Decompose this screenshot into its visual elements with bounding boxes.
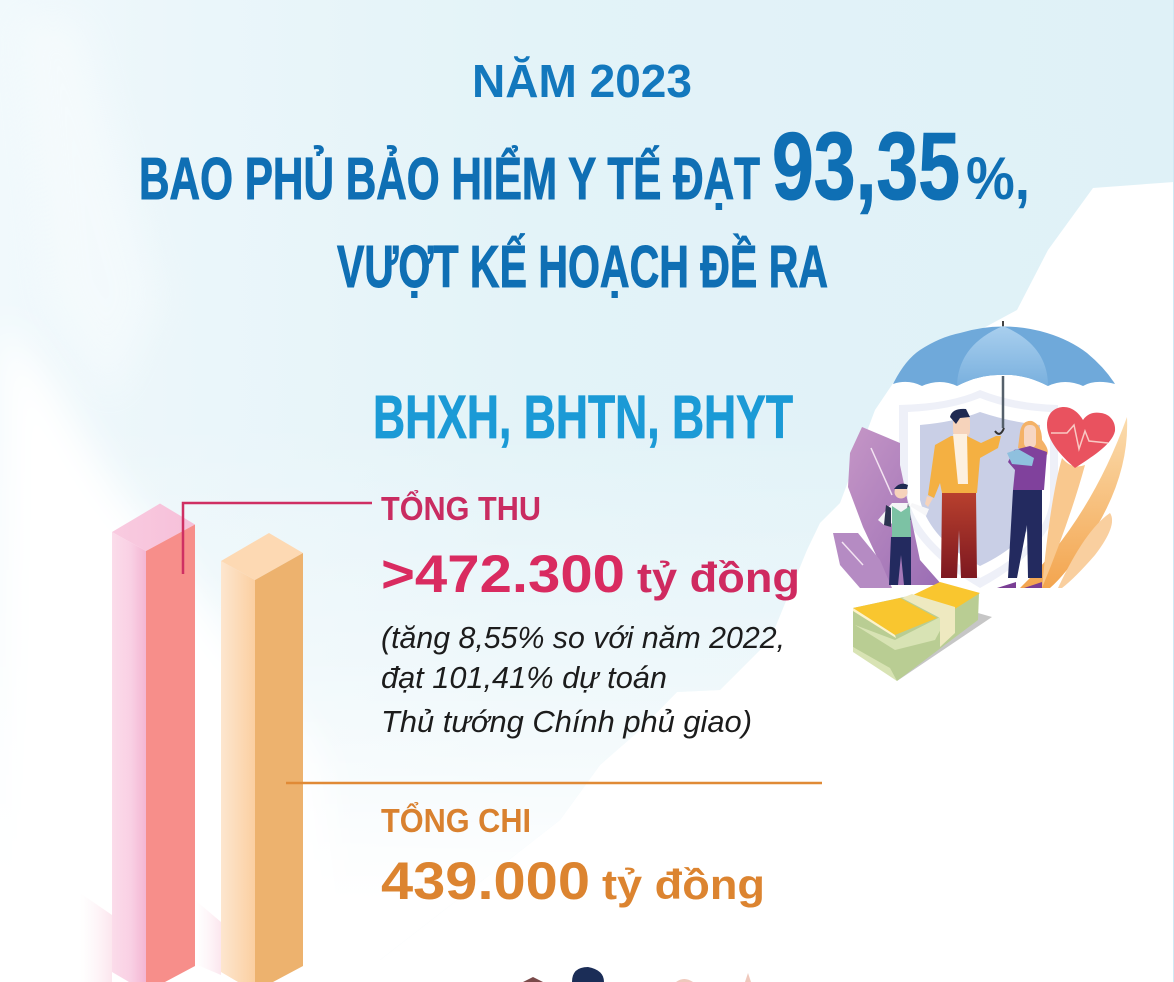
subheading: BHXH, BHTN, BHYT	[373, 383, 793, 451]
father	[925, 409, 1001, 578]
note: revenue details: Thủ tướng Chính phủ giao)	[381, 704, 752, 739]
child	[878, 484, 929, 585]
people heads at bottom edge	[523, 967, 751, 982]
note: revenue details: (tăng 8,55% so với năm 2022,	[381, 620, 785, 655]
block: total spending	[381, 802, 765, 911]
block: total revenue	[381, 490, 800, 739]
title figure: 93,35: 93,35	[772, 113, 960, 220]
mother	[997, 421, 1048, 588]
unit: total revenue: tỷ đồng	[637, 554, 800, 601]
unit: total spending: tỷ đồng	[602, 861, 765, 908]
value: total revenue: >472.300	[381, 545, 625, 604]
umbrella	[893, 321, 1115, 434]
title	[139, 55, 1030, 300]
head: dark	[572, 967, 604, 982]
connector: spending	[286, 782, 822, 784]
note: revenue details	[381, 620, 785, 739]
title line: year: NĂM 2023	[472, 55, 692, 107]
title figure: percent sign: %,	[966, 145, 1030, 212]
right edge stripe	[1173, 0, 1174, 982]
illustration: family under umbrella	[833, 321, 1127, 588]
bar: total revenue	[112, 504, 195, 982]
bar: total spending	[221, 533, 303, 982]
icon: stack of money	[853, 582, 992, 681]
heart	[1047, 407, 1115, 468]
orange leaves	[1020, 417, 1127, 588]
title line: exceeded plan: VƯỢT KẾ HOẠCH ĐỀ RA	[337, 234, 828, 300]
bar shadows	[80, 893, 221, 982]
title line: coverage: BAO PHỦ BẢO HIỂM Y TẾ ĐẠT	[139, 145, 760, 212]
label: total revenue: TỔNG THU	[381, 490, 541, 527]
hand: pink	[676, 973, 751, 982]
head: brown	[523, 977, 543, 982]
note: revenue details: đạt 101,41% dự toán	[381, 660, 667, 695]
label: total spending: TỔNG CHI	[381, 802, 531, 839]
connector: revenue	[183, 503, 372, 574]
value: total spending: 439.000	[381, 852, 590, 911]
shield	[899, 390, 1058, 588]
purple leaves	[833, 427, 942, 588]
